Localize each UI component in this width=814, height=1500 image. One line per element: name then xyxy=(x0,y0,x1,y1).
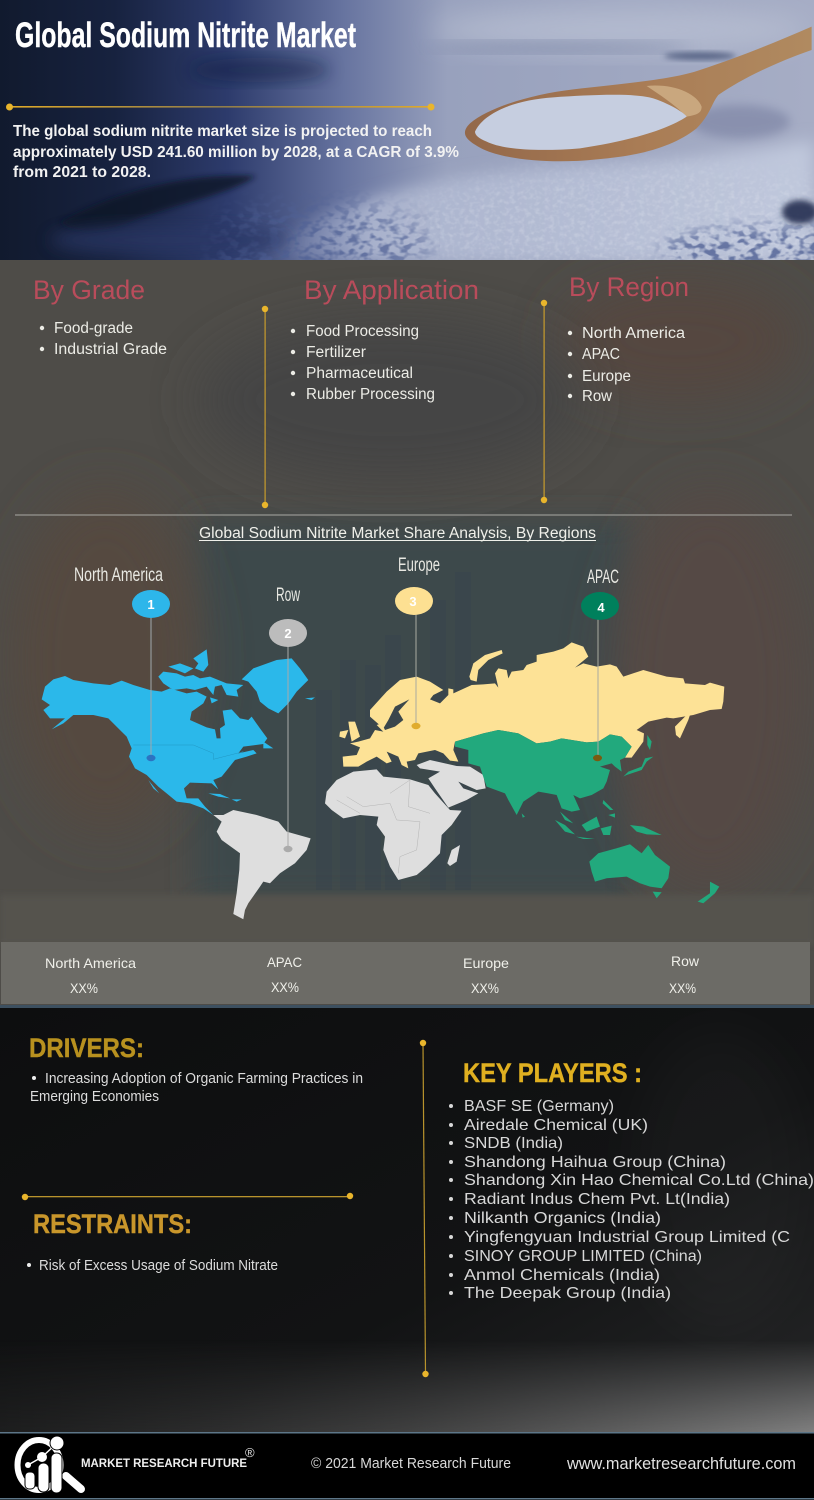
list: applications: Fertilizer xyxy=(306,344,366,361)
callout: Row pin: 2 xyxy=(284,626,292,641)
callout: APAC pin xyxy=(581,567,619,761)
map: North America xyxy=(42,649,315,815)
list: regions xyxy=(568,325,685,405)
panel: key players xyxy=(449,1058,814,1302)
panel: share table: Europe xyxy=(463,955,509,971)
list: key players: Airedale Chemical (UK) xyxy=(464,1117,648,1134)
list: key players: Radiant Indus Chem Pvt. Lt(India) xyxy=(464,1191,730,1208)
heading: By Grade: By Grade xyxy=(33,275,145,305)
map: Asia Pacific xyxy=(455,730,719,903)
panel: share table xyxy=(1,942,810,1004)
panel: share table: APAC xyxy=(267,954,302,970)
panel: dark lower section xyxy=(0,1005,814,1433)
text block: market summary: from 2021 to 2028. xyxy=(13,164,151,181)
text block: driver item: Increasing Adoption of Organic Farming Practices in xyxy=(45,1071,363,1087)
panel: share table: XX% xyxy=(471,980,499,996)
list: key players: The Deepak Group (India) xyxy=(464,1285,671,1302)
callout: North America pin: North America xyxy=(74,565,163,586)
list: key players: Yingfengyuan Industrial Group Limited (C xyxy=(464,1229,790,1246)
heading: By Application: By Application xyxy=(304,275,479,305)
heading: drivers: DRIVERS: xyxy=(29,1033,144,1063)
panel: share table: Row xyxy=(671,953,700,969)
list: regions: Row xyxy=(582,388,613,405)
list: regions: North America xyxy=(582,325,685,342)
heading: restraints: RESTRAINTS: xyxy=(33,1209,192,1239)
callout: Europe pin: 3 xyxy=(409,594,417,609)
heading: key players: KEY PLAYERS : xyxy=(463,1058,642,1088)
panel: By Region xyxy=(568,272,689,405)
divider: header gold line xyxy=(6,104,434,110)
panel: share table: North America xyxy=(45,955,136,971)
divider: gold vertical lower xyxy=(420,1040,429,1377)
panel: share table: XX% xyxy=(271,979,299,995)
callout: Europe pin: Europe xyxy=(398,555,440,576)
text block: driver item xyxy=(30,1071,363,1105)
salt heap xyxy=(250,140,814,262)
divider: gold vertical 2 xyxy=(541,300,547,503)
list: key players: BASF SE (Germany) xyxy=(464,1098,614,1115)
callout: APAC pin: 4 xyxy=(597,600,605,615)
list: applications: Pharmaceutical xyxy=(306,365,413,382)
text block: market summary: approximately USD 241.60 million by 2028, at a CAGR of 3.9% xyxy=(13,144,459,161)
title: Global Sodium Nitrite Market xyxy=(15,16,356,55)
panel: footer xyxy=(0,1432,814,1500)
list: grades xyxy=(40,320,167,358)
chart: world map xyxy=(42,555,724,919)
callout: APAC pin: APAC xyxy=(587,567,619,588)
text block: market summary xyxy=(13,123,459,181)
panel: middle background xyxy=(0,260,814,1005)
callout: Row pin xyxy=(269,585,307,852)
list: key players xyxy=(449,1098,814,1302)
list: key players: SINOY GROUP LIMITED (China) xyxy=(464,1248,702,1265)
list: applications: Rubber Processing xyxy=(306,386,435,403)
list: key players: Shandong Haihua Group (China) xyxy=(464,1154,726,1171)
callout: Row pin: Row xyxy=(276,585,300,606)
callout: North America pin xyxy=(74,565,170,761)
panel: share table: XX% xyxy=(669,980,696,996)
list: key players: Shandong Xin Hao Chemical Co.Ltd (China) xyxy=(464,1172,814,1189)
map: Africa and Middle East xyxy=(325,760,486,880)
divider: gold vertical 1 xyxy=(262,306,268,508)
panel: share table: XX% xyxy=(70,980,98,996)
list: key players: Nilkanth Organics (India) xyxy=(464,1210,661,1227)
panel: restraints xyxy=(27,1209,278,1274)
list: grades: Food-grade xyxy=(54,320,133,337)
text: copyright: © 2021 Market Research Future xyxy=(311,1455,511,1472)
text block: driver item: Emerging Economies xyxy=(30,1089,159,1105)
list: regions: APAC xyxy=(582,346,620,363)
text block: market summary: The global sodium nitrite market size is projected to reach xyxy=(13,123,432,140)
panel: header photo background xyxy=(0,0,814,262)
list: grades: Industrial Grade xyxy=(54,341,167,358)
text: registered mark: ® xyxy=(245,1445,255,1460)
text block: restraint item: Risk of Excess Usage of Sodium Nitrate xyxy=(39,1258,278,1274)
list: applications: Food Processing xyxy=(306,323,419,340)
panel: By Application xyxy=(291,275,479,403)
callout: North America pin: 1 xyxy=(147,597,155,612)
map: South America xyxy=(213,810,311,919)
list: applications xyxy=(291,323,435,403)
list: key players: Anmol Chemicals (India) xyxy=(464,1267,660,1284)
panel: By Grade xyxy=(33,275,167,358)
text: brand name: MARKET RESEARCH FUTURE xyxy=(81,1456,247,1470)
panel: drivers xyxy=(29,1033,363,1105)
map: Europe and Russia xyxy=(339,642,724,768)
chart background bars xyxy=(316,572,471,890)
divider: gold horizontal lower xyxy=(22,1193,353,1200)
list: key players: SNDB (India) xyxy=(464,1135,563,1152)
callout: Europe pin xyxy=(395,555,440,729)
icon: market research future logo xyxy=(18,1436,81,1493)
heading: By Region: By Region xyxy=(569,272,689,302)
dark speckles xyxy=(212,198,440,260)
icon: wooden spoon with salt xyxy=(465,27,812,161)
heading: share analysis: Global Sodium Nitrite Market Share Analysis, By Regions xyxy=(199,525,596,542)
list: regions: Europe xyxy=(582,368,631,385)
text: website: www.marketresearchfuture.com xyxy=(566,1454,796,1473)
